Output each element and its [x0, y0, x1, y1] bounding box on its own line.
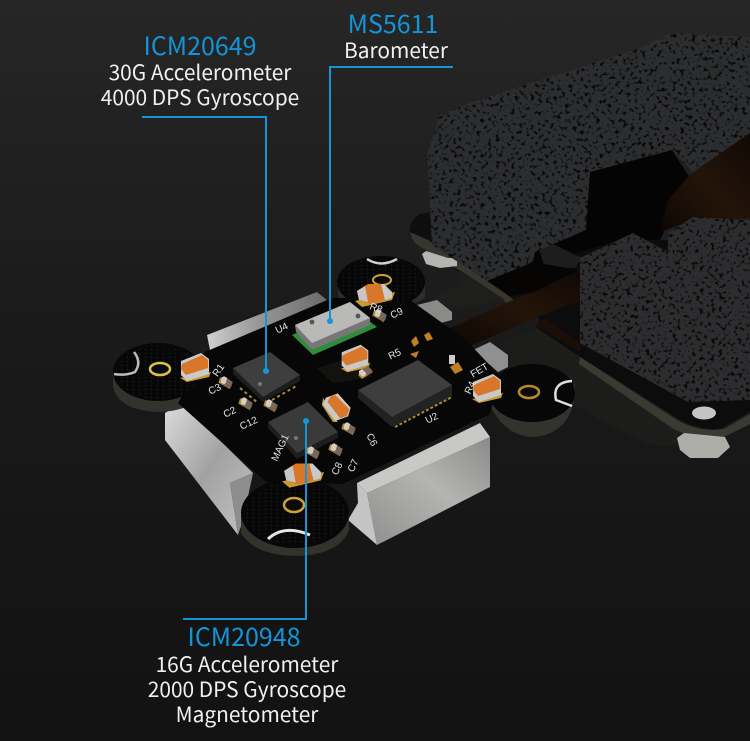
silkscreen labels: C8	[330, 460, 346, 477]
flat ribbon cable: upper	[660, 132, 750, 232]
silkscreen labels: U2	[424, 411, 440, 426]
silkscreen labels: C2	[222, 405, 238, 420]
plate tab behind foam	[537, 240, 582, 268]
silkscreen labels: C12	[238, 415, 260, 433]
foam block: lower	[580, 217, 750, 402]
silkscreen labels: R4	[463, 379, 479, 396]
silkscreen labels: R1	[211, 362, 227, 379]
carrier plate with foam dampers	[410, 33, 750, 458]
pad: bottom side	[241, 512, 349, 556]
aluminium blocks	[165, 292, 508, 545]
silkscreen labels: C6	[364, 432, 379, 448]
pad: top side	[338, 282, 425, 316]
foam block: upper	[427, 33, 750, 281]
chip: MAG	[268, 402, 338, 459]
label: ICM20948: 16G Accelerometer	[156, 649, 339, 679]
block: lower right	[348, 423, 490, 545]
block: lower left	[165, 403, 253, 535]
label: ICM20948: ICM20948	[188, 618, 300, 654]
pad: right	[489, 364, 575, 422]
label: ICM20649	[101, 27, 299, 112]
block: top right	[417, 300, 452, 325]
lower plate	[482, 300, 750, 445]
pad: bottom	[241, 478, 349, 548]
silkscreen labels: FET	[469, 361, 491, 380]
upper hex nut	[422, 251, 457, 268]
silkscreen labels: C9	[389, 306, 405, 321]
barometer MS5611	[292, 302, 377, 355]
lower screw	[692, 406, 716, 420]
silkscreen labels: R8	[368, 301, 384, 316]
callout: ICM20948 leader	[183, 418, 309, 619]
label: ICM20948: Magnetometer	[176, 699, 319, 729]
solder pads	[410, 332, 463, 374]
via: right	[519, 386, 539, 398]
lower hex nut	[677, 433, 730, 458]
chip: IMU	[233, 352, 300, 403]
via: bottom	[284, 498, 304, 512]
chip: dark centre	[317, 360, 373, 383]
arc: right pad	[555, 381, 572, 406]
arc: bottom pad	[268, 530, 310, 539]
silkscreen labels: C3	[207, 382, 223, 397]
label: MS5611: Barometer	[344, 35, 449, 65]
label: ICM20649: 4000 DPS Gyroscope	[101, 82, 299, 112]
silkscreen labels: MAG1	[270, 432, 292, 463]
block: top left	[207, 292, 327, 350]
label: MS5611: MS5611	[348, 5, 438, 41]
label: ICM20948	[148, 618, 346, 729]
flight controller board	[113, 256, 575, 556]
board outline	[178, 297, 500, 484]
label: MS5611	[344, 5, 449, 65]
capacitors: orange	[180, 284, 503, 488]
pad: right side	[490, 385, 575, 437]
label: ICM20649: ICM20649	[144, 27, 256, 63]
pad: left	[113, 343, 203, 401]
block: right	[473, 342, 508, 372]
flat ribbon cable: lower	[448, 270, 582, 346]
callout: ICM20649 leader	[142, 117, 269, 374]
silkscreen labels	[207, 301, 491, 477]
label: ICM20649: 30G Accelerometer	[109, 57, 292, 87]
callout: MS5611 leader	[327, 67, 453, 324]
dark gap behind foam	[520, 150, 690, 270]
pad: left side	[113, 370, 205, 412]
capacitors: small	[217, 306, 389, 462]
chip: U2	[358, 360, 452, 427]
arc: left pad	[114, 352, 138, 375]
via: left	[150, 363, 170, 375]
label: ICM20948: 2000 DPS Gyroscope	[148, 674, 346, 704]
LED	[449, 355, 455, 364]
upper plate	[410, 200, 610, 330]
via: top	[373, 275, 391, 285]
arc: top pad	[367, 259, 397, 264]
silkscreen labels: R5	[387, 347, 403, 362]
silkscreen labels: C7	[346, 457, 362, 474]
pad: top	[337, 256, 425, 308]
silkscreen labels: U4	[274, 321, 290, 336]
